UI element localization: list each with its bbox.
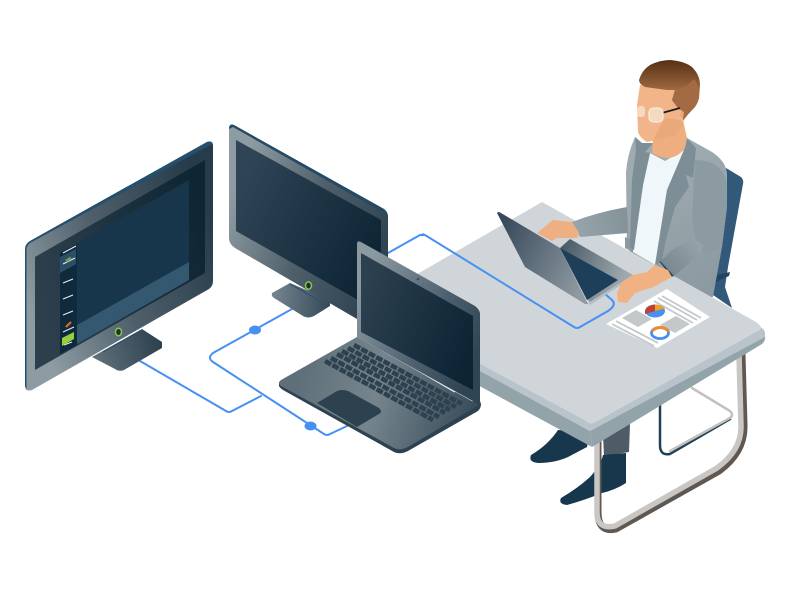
monitor 2 bbox=[229, 124, 388, 330]
chair bbox=[695, 168, 743, 308]
laptop bbox=[279, 241, 481, 453]
frame bbox=[229, 124, 388, 330]
lid bbox=[357, 241, 480, 405]
trackpad bbox=[317, 390, 381, 427]
lid screen bbox=[361, 253, 473, 390]
face bbox=[637, 85, 692, 142]
screen bbox=[236, 140, 381, 313]
donut chart bbox=[652, 328, 669, 338]
document with charts bbox=[606, 289, 710, 348]
base bbox=[279, 337, 479, 449]
right sleeve and hand bbox=[617, 238, 703, 303]
glasses bbox=[662, 108, 680, 113]
base edge bbox=[279, 382, 481, 453]
stand bbox=[92, 329, 162, 371]
connector nodes bbox=[249, 326, 316, 430]
hinge light bbox=[378, 347, 455, 392]
connector line on desk bbox=[422, 234, 614, 328]
desk top bbox=[367, 202, 761, 424]
monitor 1 bbox=[25, 142, 213, 390]
stand bbox=[272, 283, 330, 318]
ear bbox=[680, 105, 688, 120]
neck bbox=[652, 118, 687, 158]
desk front leg bbox=[597, 355, 744, 530]
head bbox=[637, 60, 700, 142]
power button bbox=[116, 328, 122, 336]
left sleeve and hand bbox=[537, 207, 628, 241]
pie chart bbox=[645, 304, 665, 318]
keyboard bbox=[325, 345, 462, 420]
lapels bbox=[630, 137, 653, 250]
jacket bbox=[626, 137, 727, 300]
desk bbox=[367, 202, 765, 530]
left jacket cuff bbox=[625, 237, 633, 252]
t-shirt bbox=[633, 150, 684, 265]
feet and trousers bbox=[530, 424, 630, 505]
desk back leg bbox=[660, 388, 732, 454]
frame bbox=[25, 142, 213, 390]
hair bbox=[639, 60, 700, 120]
power button bbox=[306, 282, 312, 289]
connector lines bbox=[140, 235, 424, 435]
camera bbox=[417, 278, 419, 280]
torso bbox=[625, 118, 727, 300]
screen bbox=[35, 160, 205, 370]
sidebar items bbox=[60, 249, 76, 273]
small laptop bbox=[497, 212, 633, 305]
desk side bbox=[367, 309, 592, 447]
